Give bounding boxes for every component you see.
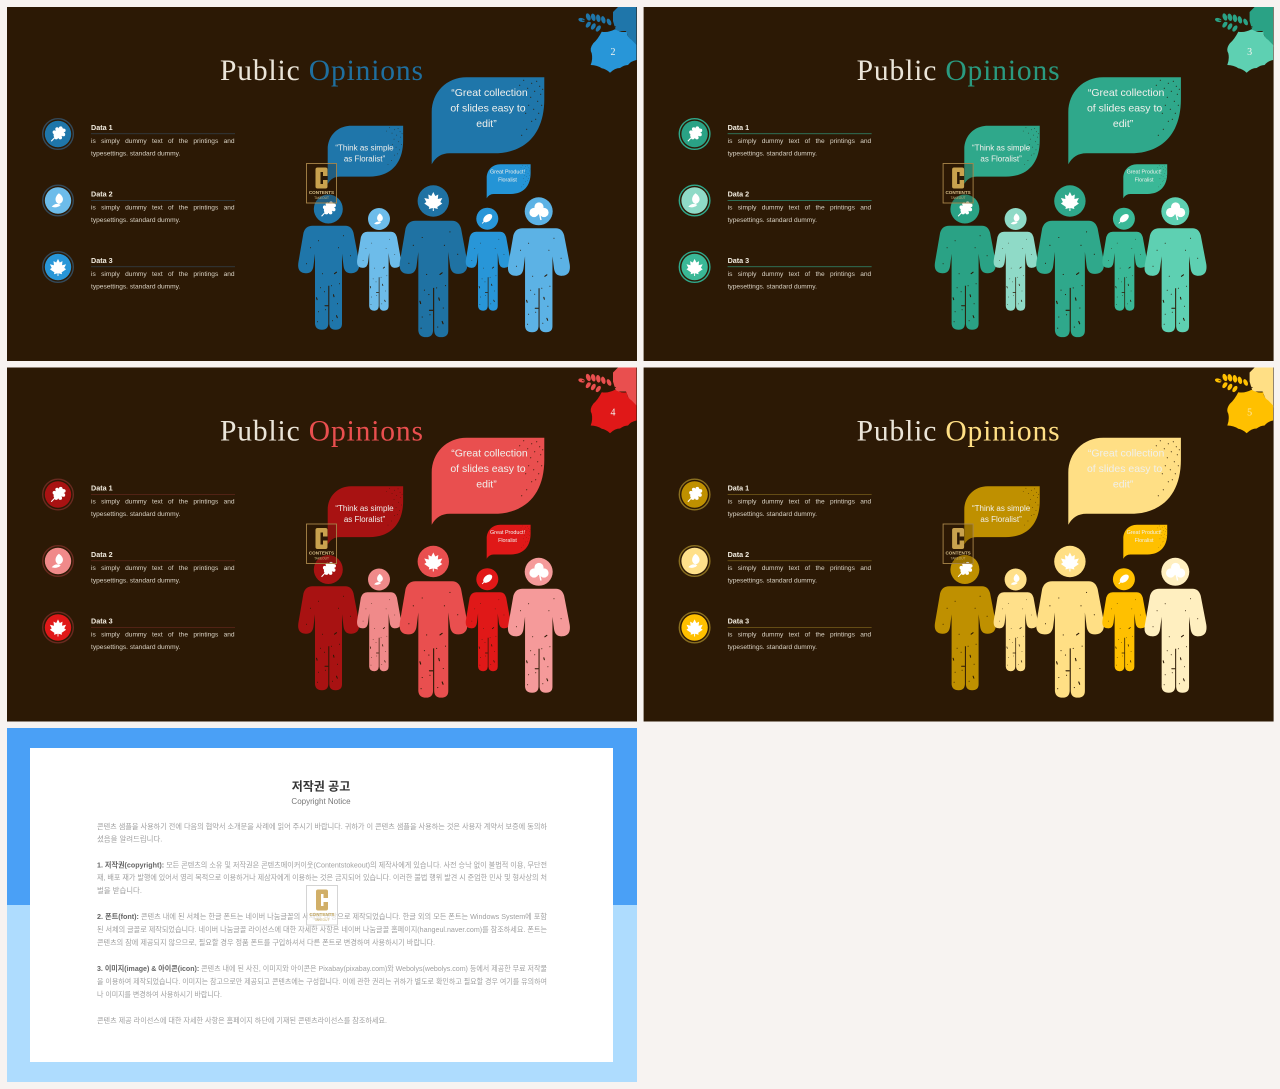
speech bubble: small: Great Product! xyxy=(490,530,526,536)
watermark logo: CONTENTS xyxy=(309,912,335,917)
corner leaf with page number xyxy=(1214,7,1273,73)
corner leaf with page number: 3 xyxy=(1247,47,1252,58)
speech bubble: medium: “Think as simple xyxy=(335,144,394,152)
person 5 xyxy=(508,197,570,332)
speech bubble: large: of slides easy to xyxy=(1087,463,1162,475)
corner leaf with page number xyxy=(578,7,636,73)
speech bubble: large: of slides easy to xyxy=(450,102,526,114)
notice section 2: font: 2. 폰트(font): 콘텐츠 내에 된 서체는 한글 폰트는 네이버 나눔글꼴의 서체를 바탕으로 제작되었습니다. 한글 외의 모든 폰트는 Windows System에 포함 xyxy=(97,912,547,921)
speech bubble: small: Floralist xyxy=(498,178,517,184)
speech bubble: large: “Great collection xyxy=(451,87,528,99)
notice section 1: copyright: 1. 저작권(copyright): 모든 콘텐츠의 소유 및 저작권은 콘텐츠메이커이웃(Contentstokeout)의 제작사에게 있습니다. 사전 승낙 없이 불법적 이용, 무단전 xyxy=(97,860,547,870)
list item: Data 2: is simply dummy text of the printings and xyxy=(728,565,872,572)
list item: Data 3: Data 3 xyxy=(91,616,113,626)
corner leaf with page number: 5 xyxy=(1247,408,1252,418)
panel: blue slide (page 2) xyxy=(7,7,637,361)
speech bubble: small: Great Product! xyxy=(1127,170,1162,176)
person 5 xyxy=(1145,558,1207,693)
list item: Data 1 xyxy=(679,119,872,158)
speech bubble: small: Floralist xyxy=(498,538,517,544)
list item: Data 3 xyxy=(43,252,235,290)
person 4 xyxy=(466,208,510,311)
speech bubble: large: of slides easy to xyxy=(450,463,526,475)
notice section 1: copyright: 벌을 받습니다. xyxy=(97,886,142,895)
list item: Data 1: typesettings. standard dummy. xyxy=(91,150,180,158)
notice intro xyxy=(97,822,547,844)
speech bubble: small: Floralist xyxy=(1135,538,1154,544)
panel: yellow slide (page 5) xyxy=(644,368,1274,722)
speech bubble: large xyxy=(432,438,544,525)
speech bubble: large: “Great collection xyxy=(1088,87,1164,99)
watermark logo xyxy=(306,164,336,203)
panel: teal slide (page 3) xyxy=(644,7,1274,361)
speech bubble: small xyxy=(1123,164,1167,198)
slide background xyxy=(644,7,1274,361)
corner leaf with page number xyxy=(1214,368,1273,433)
panel: red slide (page 4) xyxy=(7,368,637,722)
list item: Data 3: typesettings. standard dummy. xyxy=(728,284,817,290)
two-tone blue background xyxy=(7,728,637,1082)
speech bubble: medium: as Floralist” xyxy=(980,154,1022,164)
person 4 xyxy=(1102,208,1147,311)
speech bubble: small: Great Product! xyxy=(490,170,526,176)
speech bubble: large: “Great collection xyxy=(451,448,528,460)
watermark logo: TAKEOUT xyxy=(951,196,966,200)
notice section 3: image and icon xyxy=(97,964,547,999)
speech bubble: large: edit” xyxy=(476,118,497,130)
list item: Data 2 xyxy=(679,546,872,584)
list item: Data 2: typesettings. standard dummy. xyxy=(728,217,817,224)
notice intro: 콘텐츠 샘플을 사용하기 전에 다음의 협약서 소개문을 사례에 읽어 주시기 바랍니다. 귀하가 이 콘텐츠 샘플을 사용하는 것은 사용자 계약서 보증에 동의하 xyxy=(97,822,547,831)
slide background xyxy=(644,368,1274,722)
list item: Data 1: Data 1 xyxy=(91,123,113,132)
watermark logo: CONTENTS xyxy=(309,550,334,556)
list item: Data 3: Data 3 xyxy=(728,256,749,265)
speech bubble: large: edit” xyxy=(476,478,497,490)
slide background xyxy=(7,7,637,361)
person 3 xyxy=(1036,546,1104,698)
list item: Data 3 xyxy=(679,612,872,651)
watermark logo xyxy=(306,886,338,925)
list item: Data 3: typesettings. standard dummy. xyxy=(728,644,817,651)
speech bubble: large xyxy=(1068,438,1181,525)
speech bubble: medium xyxy=(328,126,403,184)
list item: Data 1: typesettings. standard dummy. xyxy=(728,150,817,158)
list item: Data 1: is simply dummy text of the printings and xyxy=(91,138,235,145)
speech bubble: small xyxy=(1123,525,1167,559)
title: Public Opinions xyxy=(220,55,423,87)
list item: Data 3: is simply dummy text of the printings and xyxy=(728,271,872,278)
speech bubble: medium xyxy=(328,486,403,544)
list item: Data 2: Data 2 xyxy=(91,190,113,198)
watermark logo xyxy=(306,524,336,564)
person 1 xyxy=(935,194,996,330)
speech bubble: medium: “Think as simple xyxy=(972,144,1031,152)
speech bubble: small xyxy=(487,164,531,198)
corner leaf with page number: 2 xyxy=(610,47,616,58)
speech bubble: medium: as Floralist” xyxy=(980,515,1022,524)
watermark logo xyxy=(943,524,973,564)
list item: Data 2: is simply dummy text of the printings and xyxy=(728,204,872,212)
list item: Data 2 xyxy=(43,185,235,224)
watermark logo: TAKEOUT xyxy=(314,196,329,200)
list item: Data 1 xyxy=(679,479,872,518)
person 3 xyxy=(400,546,467,698)
watermark logo: CONTENTS xyxy=(945,550,971,556)
corner leaf with page number xyxy=(578,368,636,433)
person 3 xyxy=(1036,185,1104,337)
list item: Data 3: Data 3 xyxy=(728,616,749,626)
list item: Data 1: Data 1 xyxy=(728,484,749,492)
list item: Data 2: typesettings. standard dummy. xyxy=(728,578,817,584)
speech bubble: medium: “Think as simple xyxy=(335,504,394,513)
slide background xyxy=(7,368,637,722)
speech bubble: large: “Great collection xyxy=(1088,448,1164,460)
list item: Data 1: is simply dummy text of the printings and xyxy=(728,138,872,145)
list item: Data 2: Data 2 xyxy=(728,550,749,559)
notice section 2: font: 된 서체의 글꼴로 제작되었습니다. 네이버 나눔글꼴 라이선스에 대한 자세한 사항은 네이버 나눔글꼴 홈페이지(hangeul.naver.com)를 참조하세요. 폰트는 xyxy=(97,925,547,934)
watermark logo: TAKEOUT xyxy=(951,556,966,560)
person 1 xyxy=(935,555,996,690)
speech bubble: medium xyxy=(964,486,1040,544)
list item: Data 2 xyxy=(679,185,872,224)
watermark logo: CONTENTS xyxy=(945,190,971,195)
person 5 xyxy=(508,558,570,693)
person 2 xyxy=(357,568,401,671)
list item: Data 3 xyxy=(43,612,235,651)
list item: Data 3: is simply dummy text of the printings and xyxy=(91,271,235,278)
notice section 2: font: 콘텐츠의 잠에 제공되지 않으므로, 필요할 경우 정품 폰트를 구입하셔서 다른 폰트로 변경하여 사용하시기 바랍니다. xyxy=(97,938,435,947)
title: Public Opinions xyxy=(857,416,1060,448)
list item: Data 1 xyxy=(43,119,235,158)
notice section 3: image and icon: 3. 이미지(image) & 아이콘(icon): 콘텐츠 내에 된 사진, 이미지와 아이콘은 Pixabay(pixabay.com)와 Webolys(webolys.com) 등에서 제공한 무료 저작물 xyxy=(97,964,547,973)
person 5 xyxy=(1145,197,1207,332)
list item: Data 3: is simply dummy text of the printings and xyxy=(728,632,872,638)
speech bubble: medium: as Floralist” xyxy=(344,154,386,164)
list item: Data 2: typesettings. standard dummy. xyxy=(91,578,180,584)
list item: Data 1: Data 1 xyxy=(728,123,749,132)
watermark logo xyxy=(943,164,973,203)
speech bubble: large xyxy=(1068,77,1181,164)
notice section 1: copyright: 재, 배포 재가 발행에 있어서 영리 목적으로 이용하거나 제삼자에게 이용하는 것은 금지되어 있습니다. 이러한 불법 행위 발견 시 준엄한 민사 및 형사상의 처 xyxy=(97,873,547,882)
watermark logo: CONTENTS xyxy=(309,190,334,195)
watermark logo: TAKEOUT xyxy=(315,918,329,922)
speech bubble: small: Floralist xyxy=(1135,178,1154,184)
list item: Data 2: Data 2 xyxy=(728,190,749,198)
person 1 xyxy=(298,555,359,690)
speech bubble: large: edit” xyxy=(1113,478,1134,490)
panel: copyright notice slide xyxy=(7,728,637,1082)
notice section 1: copyright xyxy=(97,860,547,895)
speech bubble: medium: “Think as simple xyxy=(972,504,1031,513)
person 3 xyxy=(400,185,467,337)
list item: Data 1: typesettings. standard dummy. xyxy=(728,511,817,518)
speech bubble: medium: as Floralist” xyxy=(344,515,386,524)
notice heading: 저작권 공고 xyxy=(292,778,350,794)
list item: Data 1: is simply dummy text of the printings and xyxy=(728,498,872,506)
list item: Data 2: Data 2 xyxy=(91,550,113,559)
speech bubble: large: of slides easy to xyxy=(1087,102,1162,114)
list item: Data 2: is simply dummy text of the printings and xyxy=(91,204,235,212)
list item: Data 3 xyxy=(679,252,872,290)
notice section 3: image and icon: 나 이미지를 변경하여 사용하시기 바랍니다. xyxy=(97,990,222,999)
speech bubble: large xyxy=(432,77,544,164)
notice section 3: image and icon: 을 이용하여 제작되었습니다. 이미지는 참고으로만 제공되고 콘텐츠에는 구성합니다. 이에 관한 권리는 귀하가 별도로 확인하고 필요할 경우 여기를 유의하여 xyxy=(97,977,547,986)
person 2 xyxy=(357,208,401,311)
watermark logo: TAKEOUT xyxy=(314,556,329,560)
speech bubble: small xyxy=(487,525,531,559)
notice intro: 셨음을 알려드립니다. xyxy=(97,834,162,844)
list item: Data 3: Data 3 xyxy=(91,256,113,265)
person 4 xyxy=(466,568,510,671)
person 4 xyxy=(1102,568,1147,671)
notice section 2: font xyxy=(97,912,547,947)
list item: Data 1: is simply dummy text of the printings and xyxy=(91,498,235,506)
speech bubble: medium xyxy=(964,126,1040,184)
person 2 xyxy=(994,568,1038,671)
list item: Data 1: Data 1 xyxy=(91,484,113,492)
list item: Data 3: typesettings. standard dummy. xyxy=(91,644,180,651)
speech bubble: small: Great Product! xyxy=(1127,530,1162,536)
white notice card xyxy=(30,748,613,1062)
list item: Data 2: typesettings. standard dummy. xyxy=(91,217,180,224)
list item: Data 2: is simply dummy text of the printings and xyxy=(91,565,235,572)
list item: Data 3: is simply dummy text of the printings and xyxy=(91,632,235,638)
person 1 xyxy=(298,194,359,330)
title: Public Opinions xyxy=(857,55,1060,87)
speech bubble: large: edit” xyxy=(1113,118,1134,130)
notice footer line: 콘텐츠 제공 라이선스에 대한 자세한 사항은 홈페이지 하단에 기재된 콘텐츠라이선스를 참조하세요. xyxy=(97,1016,387,1025)
list item: Data 1 xyxy=(43,479,235,518)
list item: Data 3: typesettings. standard dummy. xyxy=(91,284,180,290)
notice subheading: Copyright Notice xyxy=(291,797,351,806)
title: Public Opinions xyxy=(220,416,423,448)
list item: Data 1: typesettings. standard dummy. xyxy=(91,511,180,518)
person 2 xyxy=(994,208,1038,311)
corner leaf with page number: 4 xyxy=(610,408,616,418)
list item: Data 2 xyxy=(43,546,235,584)
